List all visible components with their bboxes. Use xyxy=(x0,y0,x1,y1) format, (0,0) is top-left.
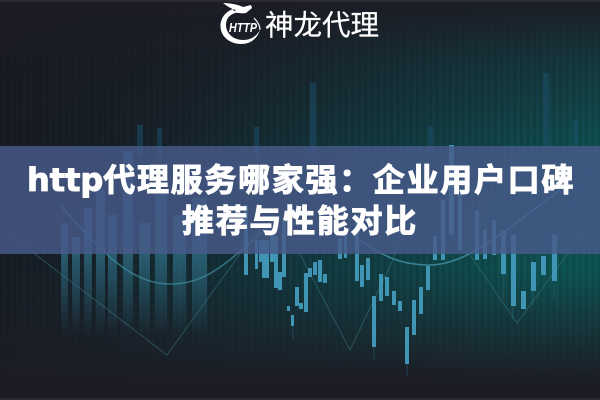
title band xyxy=(0,146,600,254)
smooth curves xyxy=(60,190,560,284)
trend lines xyxy=(10,225,590,355)
title line 2: 推荐与性能对比 xyxy=(182,202,418,240)
logo wordmark: 神龙代理 xyxy=(265,3,379,44)
logo icon: dragon ring with HTTP: HTTP xyxy=(229,20,257,35)
dim candles above the band xyxy=(137,73,578,158)
candlesticks xyxy=(244,145,557,364)
title line 1: http代理服务哪家强：企业用户口碑 xyxy=(27,161,575,199)
candle wicks xyxy=(293,274,554,376)
faded columns xyxy=(61,151,207,335)
logo icon: dragon ring with HTTP xyxy=(220,3,261,44)
